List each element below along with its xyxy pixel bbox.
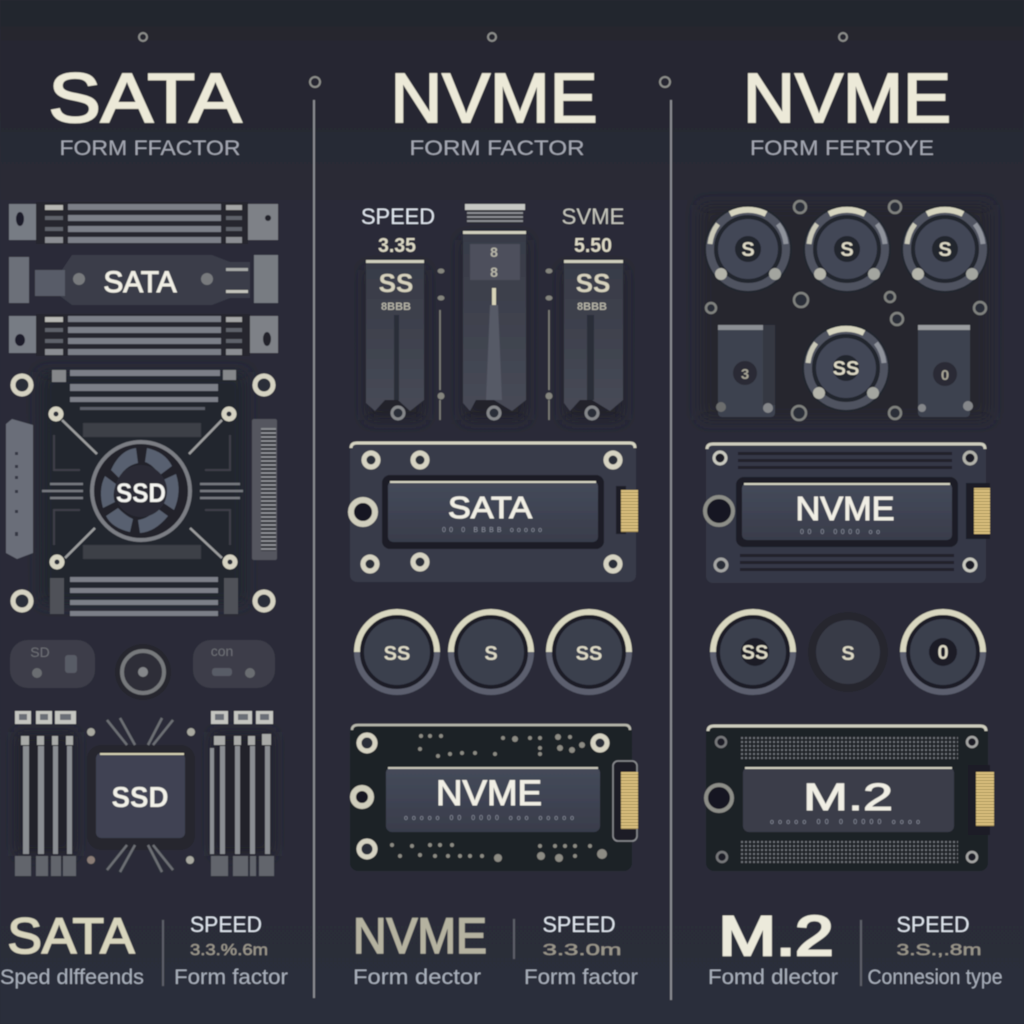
screw dials: S (741, 239, 755, 261)
SATA drive card: 00 0 BBBB ooooo (442, 527, 542, 534)
heading: NVME: NVME (390, 59, 598, 137)
indicator dials (357, 612, 629, 692)
footer: SATA summary (0, 908, 288, 989)
M.2 module card: ooooo 00 0 0000 oooo (770, 819, 920, 826)
drive stick centre: 8 (490, 244, 498, 260)
muted connector row: SD (30, 644, 50, 660)
speed labels: 3.35 (378, 235, 416, 257)
indicator dials: S (484, 643, 498, 665)
clip left (716, 325, 775, 417)
drive stick left: SS (379, 268, 413, 298)
footer: NVME summary (353, 908, 638, 989)
footer: NVME summary: Form dector (353, 966, 481, 989)
side block right (252, 419, 277, 560)
SATA label plate (9, 255, 278, 305)
footer: SATA summary: Sped dlffeends (0, 966, 144, 989)
drive stick right: 8BBB (577, 301, 607, 313)
footer: SATA summary: SATA (8, 908, 135, 964)
dot rails (438, 269, 552, 420)
footer: SATA summary: 3.3.%.6m (190, 942, 268, 959)
column divider right (670, 100, 672, 1000)
SSD chip (87, 718, 195, 872)
fan module (6, 370, 277, 616)
footer: M.2 summary: Connesion type (868, 966, 1002, 989)
screw dials: S (840, 239, 854, 261)
NVME drive card (350, 725, 638, 871)
heading: SATA: SATA (48, 59, 242, 137)
fan label: SSD (116, 478, 166, 508)
connector bracket top (9, 202, 278, 244)
drive stick left (366, 260, 424, 420)
footer: SATA summary: SPEED (190, 912, 262, 937)
traces (62, 420, 222, 558)
drive stick centre (463, 204, 526, 420)
SATA label plate: SATA (104, 266, 176, 299)
NVME module card (705, 443, 990, 583)
small rings (706, 201, 986, 420)
footer: M.2 summary: Fomd dlector (708, 966, 838, 989)
indicator dials: SS (384, 643, 410, 665)
SSD chip: SSD (112, 782, 168, 814)
connector bracket lower (9, 314, 278, 356)
footer: M.2 summary: SPEED (896, 912, 970, 937)
speed labels: SVME (562, 204, 624, 229)
lower dials: SS (742, 642, 768, 664)
subheading: form factor: FORM FERTOYE (750, 137, 934, 160)
speed labels: SPEED (361, 204, 435, 229)
indicator dials: SS (576, 643, 602, 665)
clip right: 0 (941, 367, 949, 384)
lower dials (713, 612, 983, 692)
lower dials: S (841, 643, 855, 665)
muted connector row: con (211, 643, 233, 659)
footer: NVME summary: NVME (353, 908, 487, 964)
screw dials (700, 205, 990, 420)
footer: M.2 summary (708, 904, 1002, 989)
drive stick right (564, 260, 623, 420)
footer: SATA summary: Form factor (174, 966, 288, 989)
panel: NVME column (350, 59, 638, 989)
SATA drive card (350, 442, 638, 582)
card label: M.2 (803, 777, 893, 819)
side block left (6, 419, 33, 559)
top markers (139, 33, 847, 87)
panel: SATA column (0, 59, 288, 989)
footer: M.2 summary: 3.S.,.8m (896, 942, 982, 959)
clip left: 3 (741, 366, 749, 383)
screw dials: S (938, 239, 952, 261)
footer: M.2 summary: M.2 (718, 904, 834, 967)
column divider left (313, 100, 315, 998)
lower dials: 0 (937, 642, 949, 664)
panel: M.2 column (700, 59, 1002, 989)
drive stick right: SS (576, 268, 610, 298)
subheading: form factor: FORM FACTOR (410, 137, 584, 160)
drive stick centre: 8 (490, 264, 498, 280)
M.2 module card (706, 725, 994, 871)
subheading: form factor: FORM FFACTOR (60, 137, 240, 160)
card label: NVME (796, 490, 894, 527)
NVME drive card: ooooo 00 0000 ooo ooooo (404, 815, 574, 822)
NVME module card: 00 0 0000 oo (800, 529, 880, 536)
card label: SATA (448, 490, 532, 525)
footer: NVME summary: SPEED (542, 912, 616, 937)
left pin header (15, 711, 76, 876)
clip right (918, 325, 973, 417)
card label: NVME (436, 774, 542, 813)
muted connector row (10, 640, 275, 700)
screw dials: SS (833, 358, 859, 380)
drive stick left: 8BBB (381, 301, 411, 313)
footer: NVME summary: Form factor (524, 966, 638, 989)
footer: NVME summary: 3.3.0m (542, 942, 622, 959)
heading: NVME: NVME (743, 59, 951, 137)
fan (92, 442, 190, 540)
right pin header (210, 711, 274, 876)
speed labels (361, 204, 624, 257)
speed labels: 5.50 (574, 235, 612, 257)
